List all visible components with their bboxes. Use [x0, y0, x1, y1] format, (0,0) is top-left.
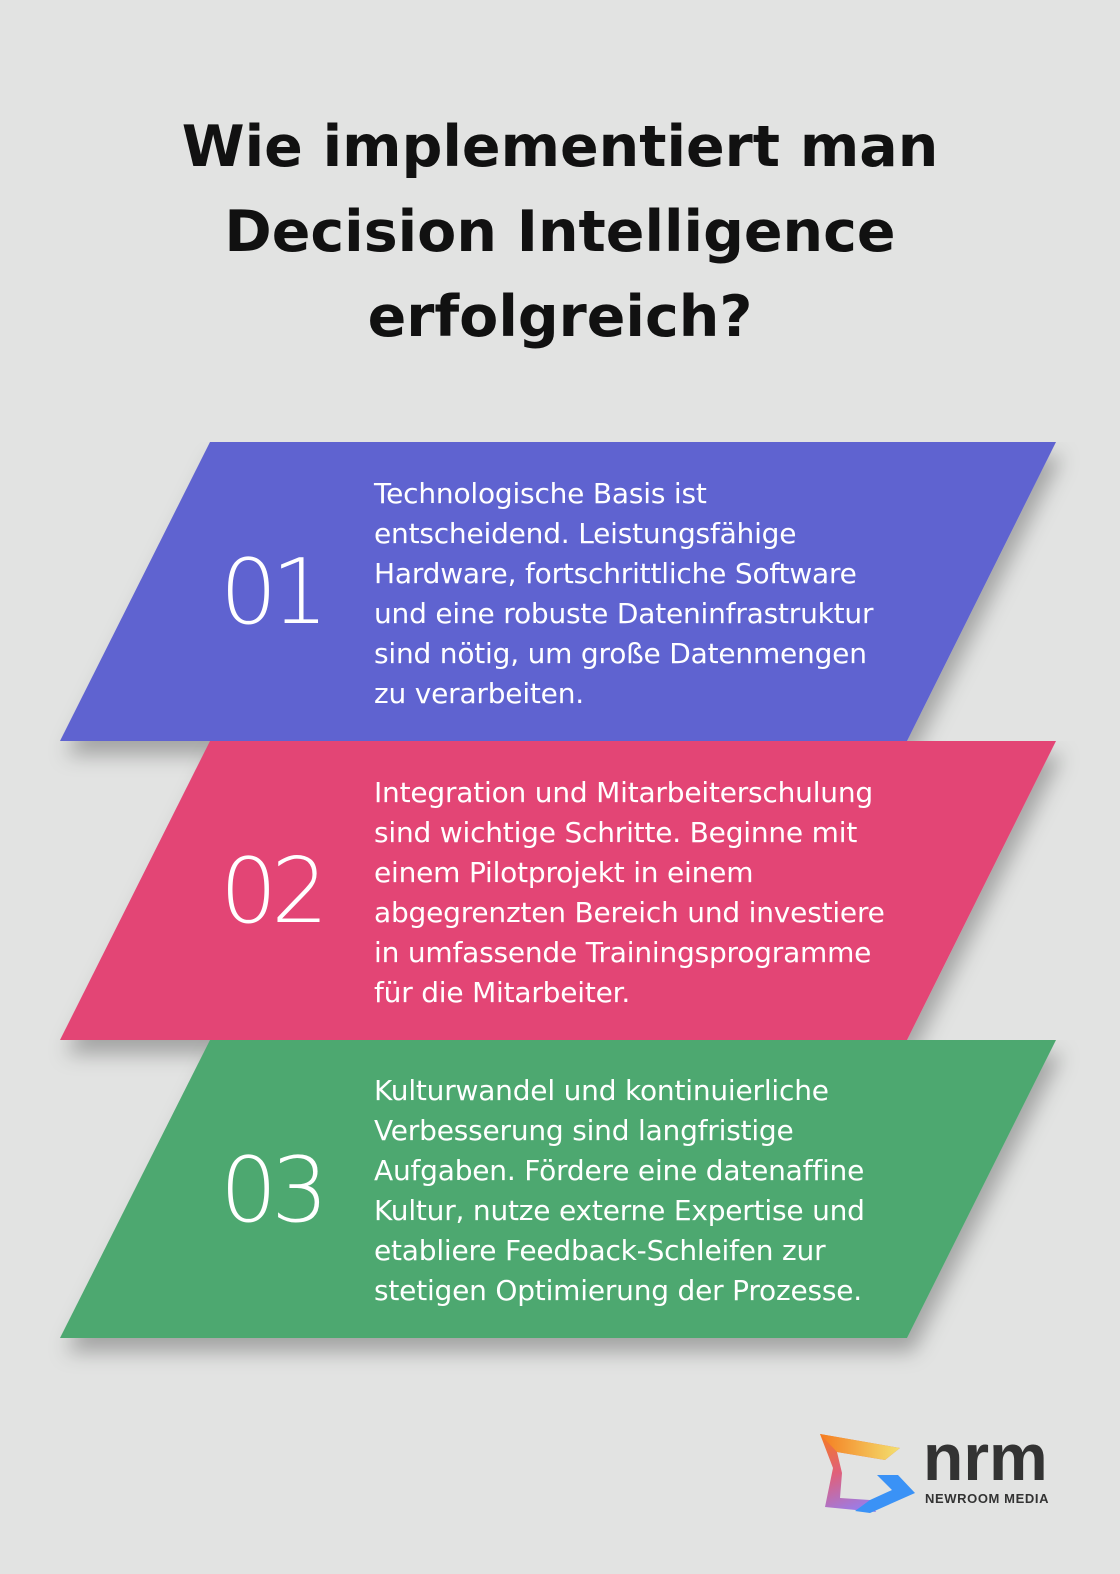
panel: 01	[60, 442, 1066, 766]
text 03: Verbesserung sind langfristige	[374, 1114, 794, 1147]
brand name: nrm	[923, 1420, 1048, 1494]
text 02: in umfassende Trainingsprogramme	[374, 936, 871, 969]
text 01	[374, 477, 874, 710]
shape 02	[60, 741, 1066, 1065]
text 03: Aufgaben. Fördere eine datenaffine	[374, 1154, 864, 1187]
text 03: etabliere Feedback-Schleifen zur	[374, 1234, 825, 1267]
brand subtitle: NEWROOM MEDIA	[925, 1491, 1049, 1506]
title: Decision Intelligence	[224, 199, 896, 265]
text 02: Integration und Mitarbeiterschulung	[374, 776, 873, 809]
number 01: 01	[220, 540, 323, 645]
icon: logo mark	[820, 1434, 915, 1513]
text 01: sind nötig, um große Datenmengen	[374, 637, 867, 670]
text 03: stetigen Optimierung der Prozesse.	[374, 1274, 862, 1307]
text 01: entscheidend. Leistungsfähige	[374, 517, 796, 550]
number 02: 02	[220, 839, 323, 944]
text 01: Hardware, fortschrittliche Software	[374, 557, 857, 590]
number 03: 03	[220, 1138, 323, 1243]
logo	[820, 1420, 1049, 1513]
text 02: für die Mitarbeiter.	[374, 976, 630, 1009]
text 03: Kulturwandel und kontinuierliche	[374, 1074, 829, 1107]
shape 03	[60, 1040, 1066, 1363]
text 02: einem Pilotprojekt in einem	[374, 856, 753, 889]
text 01: und eine robuste Dateninfrastruktur	[374, 597, 873, 630]
text 01: Technologische Basis ist	[374, 477, 707, 510]
text 03	[374, 1074, 865, 1307]
title: Wie implementiert man	[182, 114, 938, 180]
shape 01	[60, 442, 1066, 766]
text 03: Kultur, nutze externe Expertise und	[374, 1194, 865, 1227]
title	[182, 114, 938, 350]
panel: 02	[60, 741, 1066, 1065]
panel: 03	[60, 1040, 1066, 1363]
text 02: abgegrenzten Bereich und investiere	[374, 896, 885, 929]
text 01: zu verarbeiten.	[374, 677, 584, 710]
text 02: sind wichtige Schritte. Beginne mit	[374, 816, 857, 849]
text 02	[374, 776, 885, 1009]
title: erfolgreich?	[368, 284, 752, 350]
